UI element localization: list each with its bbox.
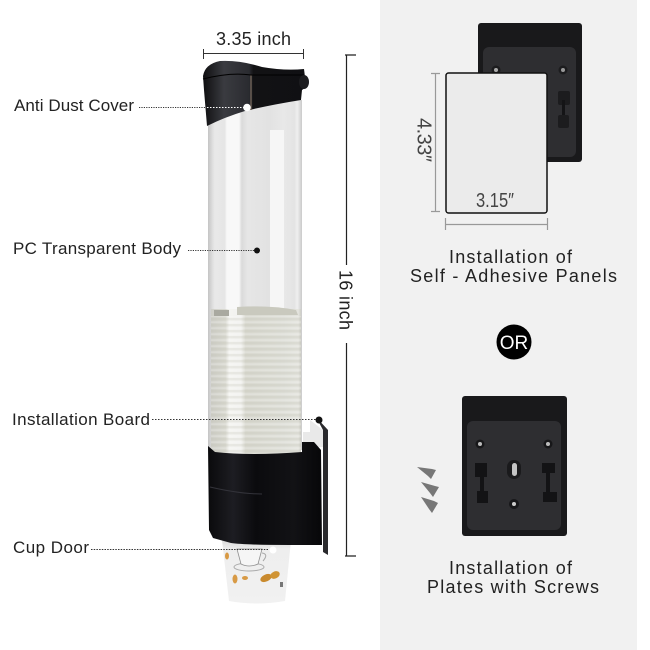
caption: self-adhesive panels: Self - Adhesive Panels [410,266,617,286]
caption: self-adhesive panels [410,247,617,286]
black mounting plate behind adhesive panel [478,23,582,162]
label: Installation Board [12,410,322,429]
OR badge: OR [500,333,528,354]
panel: installation options background [380,0,637,650]
label: Installation Board: Installation Board [12,410,150,429]
label: Anti Dust Cover [14,96,251,115]
label: PC Transparent Body: PC Transparent Body [13,239,182,258]
dimension: width 3.35 inch [204,29,304,59]
anti dust cover [203,61,309,126]
paper cup [222,540,291,604]
label: Cup Door [13,538,276,557]
dimension: width 3.35 inch: 3.35 inch [216,29,291,49]
cup door base [208,442,322,545]
caption: plates with screws [427,558,599,597]
dimension: panel height 4.33 inch: 4.33″ [412,118,434,162]
label: PC Transparent Body [13,239,260,258]
OR badge [496,324,532,360]
caption: self-adhesive panels: Installation of [449,247,573,267]
dimension: height 16 inch: 16 inch [336,270,356,330]
mounting plate with screw holes [462,396,567,536]
self-adhesive white panel [446,73,547,213]
caption: plates with screws: Installation of [449,558,573,578]
dimension: panel width 3.15 inch [446,190,548,230]
label: Cup Door: Cup Door [13,538,89,557]
cup dispenser product [203,61,328,604]
dimension: panel height 4.33 inch [412,74,440,212]
label: Anti Dust Cover: Anti Dust Cover [14,96,134,115]
dimension: height 16 inch [336,55,356,556]
transparent tube body [208,100,302,450]
icon: screws [417,467,439,513]
caption: plates with screws: Plates with Screws [427,577,599,597]
stack of paper cups [211,306,301,455]
installation board [303,417,328,555]
dimension: panel width 3.15 inch: 3.15″ [476,190,514,212]
